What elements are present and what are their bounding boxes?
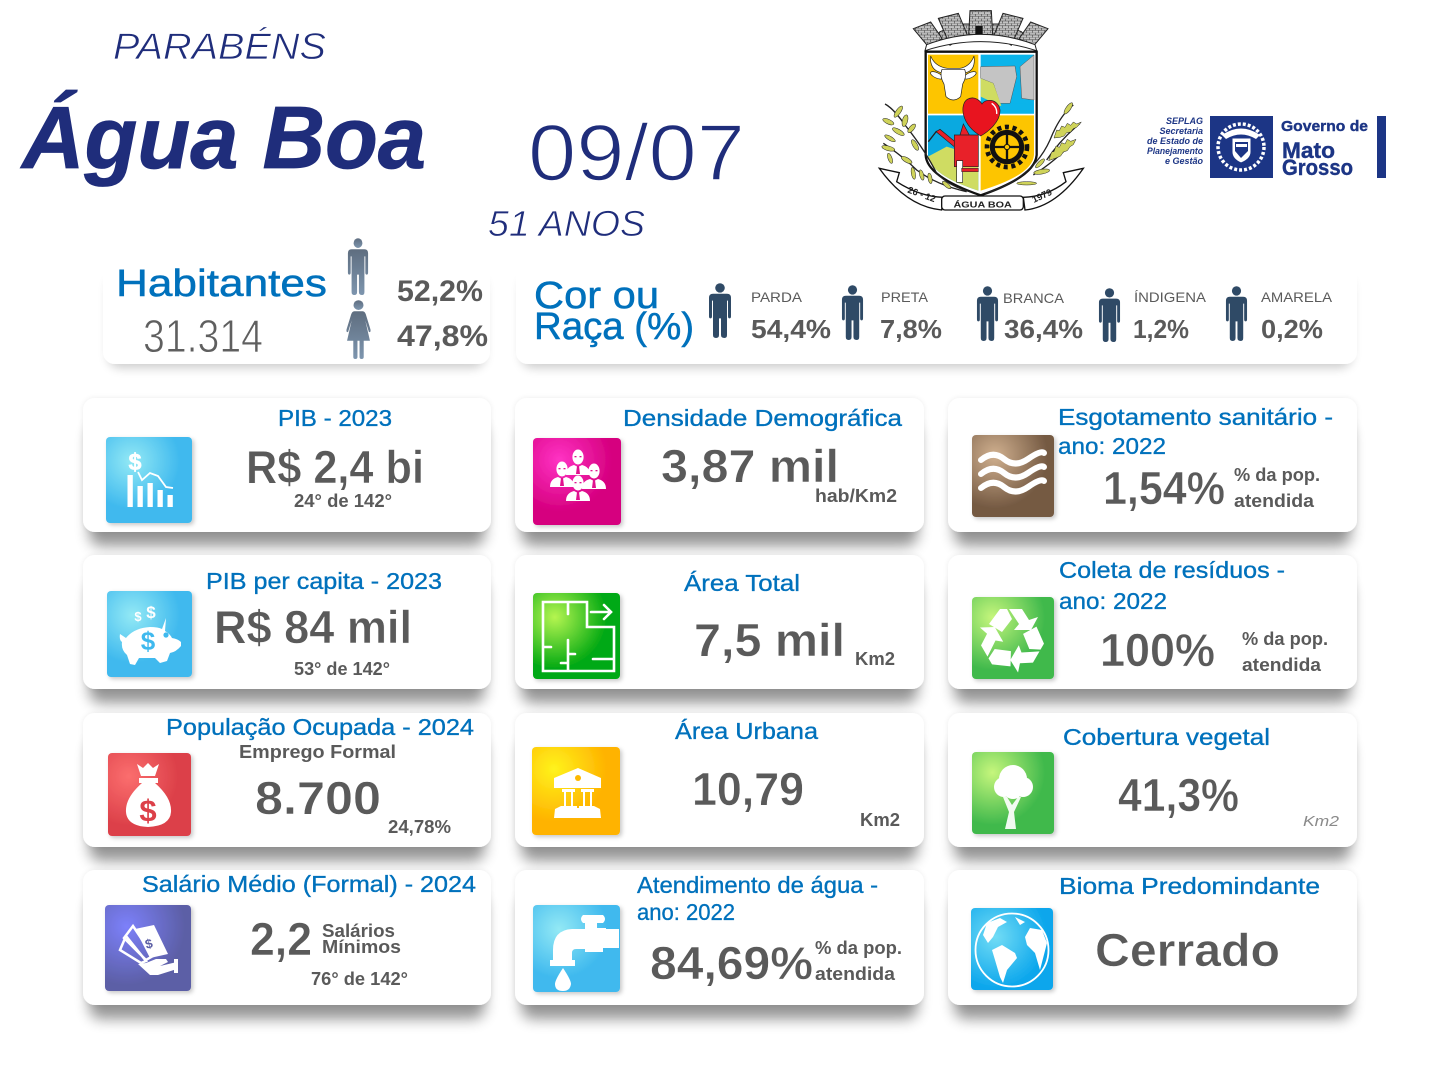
icon: money bag	[108, 753, 191, 836]
value: 7,5 mil	[694, 614, 845, 666]
wreath: branch and wheat	[881, 102, 1081, 193]
icon: water tap	[533, 905, 620, 992]
label: Habitantes: Habitantes	[116, 263, 327, 305]
group: preta: PRETA	[881, 289, 929, 305]
heading: Cor ou Raça: Cor ou	[534, 275, 659, 317]
shield	[926, 52, 1037, 195]
panel: coleta de resíduos	[948, 555, 1357, 689]
group: amarela: 0,2%	[1261, 314, 1323, 344]
ranking: 53° de 142°	[294, 659, 390, 679]
ribbon with motto: 26 - 12	[906, 185, 937, 204]
icon: floor plan	[533, 593, 620, 679]
panel: cobertura vegetal	[948, 713, 1357, 847]
icon: money bag: $	[139, 793, 157, 828]
heading: PARABÉNS: PARABÉNS	[113, 26, 326, 67]
panel: área total	[515, 555, 924, 689]
card background	[83, 713, 491, 847]
card background	[83, 398, 491, 532]
unit: % da pop.	[1234, 465, 1320, 485]
SEPLAG wording	[1147, 116, 1203, 166]
card background	[83, 870, 491, 1005]
unit	[1242, 629, 1328, 675]
logo: SEPLAG Governo de Mato Grosso	[1147, 116, 1386, 180]
value: 84,69%	[650, 937, 813, 989]
card background	[515, 398, 924, 532]
SEPLAG wording: SEPLAG	[1166, 116, 1203, 126]
wordmark	[1281, 116, 1386, 180]
icon: globe	[971, 908, 1053, 990]
value: 2,2	[250, 913, 312, 965]
group: parda	[709, 283, 831, 344]
icon: cash in hand: $	[143, 935, 155, 952]
value: 31.314: 31.314	[143, 310, 263, 362]
panel: esgotamento sanitário	[948, 398, 1357, 532]
card background	[83, 555, 491, 689]
SEPLAG wording: de Estado de	[1147, 136, 1203, 146]
heading: PIB per capita - 2023	[206, 568, 442, 594]
unit: atendida	[815, 964, 896, 984]
unit: atendida	[1234, 491, 1315, 511]
icon: woman	[346, 300, 371, 359]
icon: city building	[532, 747, 620, 835]
value: Cerrado	[1095, 924, 1280, 976]
heading: Coleta de resíduos -	[1059, 557, 1285, 583]
group: parda: 54,4%	[751, 314, 831, 344]
panel: PIB per capita	[83, 555, 491, 689]
group: preta: 7,8%	[880, 314, 942, 344]
cor ou raça background	[516, 262, 1357, 364]
heading: PIB - 2023	[278, 405, 392, 431]
wordmark: Grosso	[1282, 155, 1353, 180]
heading: ano: 2022	[1059, 588, 1167, 614]
unit: Km2	[860, 810, 900, 830]
panel: atendimento de água	[515, 870, 924, 1005]
panel: área urbana	[515, 713, 924, 847]
heading	[1058, 404, 1333, 459]
card background	[515, 555, 924, 689]
share: 24,78%	[388, 817, 451, 837]
habitantes background	[103, 262, 490, 364]
heading: População Ocupada - 2024	[166, 714, 474, 740]
heading: ano: 2022	[637, 899, 735, 925]
unit: Salários	[322, 921, 395, 941]
group: amarela	[1226, 286, 1333, 344]
icon: waves	[972, 435, 1054, 517]
logo: brasão de Água Boa	[879, 11, 1083, 210]
heading: Cor ou Raça	[534, 275, 694, 348]
value: 41,3%	[1118, 769, 1239, 821]
heading: Salário Médio (Formal) - 2024	[142, 871, 476, 897]
heading	[1059, 557, 1285, 614]
card background	[948, 555, 1357, 689]
unit: % da pop.	[815, 938, 902, 958]
value: R$ 2,4 bi	[246, 441, 424, 493]
unit	[322, 921, 401, 957]
panel: bioma predominante	[948, 870, 1357, 1005]
unit: % da pop.	[1242, 629, 1328, 649]
icon: falling chart	[106, 437, 192, 523]
group: branca: BRANCA	[1003, 290, 1065, 306]
subtitle: 51 anos: 51 ANOS	[488, 203, 645, 244]
unit	[815, 938, 902, 984]
value: 3,87 mil	[661, 440, 839, 492]
card background	[948, 398, 1357, 532]
unit: Km2	[1303, 813, 1340, 830]
icon: piggy bank: $	[134, 609, 142, 624]
icon: recycle	[972, 597, 1054, 679]
date: 09/07: 09/07	[528, 108, 745, 197]
value: R$ 84 mil	[214, 601, 412, 653]
ribbon with motto: 1979	[1031, 187, 1054, 205]
panel: população ocupada	[83, 713, 491, 847]
group: indígena: 1,2%	[1133, 314, 1189, 344]
icon: piggy bank: $	[141, 626, 156, 656]
icon: piggy bank	[107, 591, 192, 677]
card background	[948, 870, 1357, 1005]
subheading: Emprego Formal	[239, 742, 396, 762]
heading: Cor ou Raça: Raça (%)	[534, 306, 694, 348]
group: amarela: AMARELA	[1261, 289, 1333, 305]
SEPLAG wording: Planejamento	[1147, 146, 1203, 156]
group: preta	[842, 285, 942, 344]
group: indígena: ÍNDIGENA	[1134, 289, 1207, 305]
heading: Esgotamento sanitário -	[1058, 404, 1333, 430]
group: parda: PARDA	[751, 289, 803, 305]
ribbon with motto	[879, 168, 1083, 210]
title: Água Boa: Água Boa	[20, 88, 426, 187]
coat of arms crown	[913, 11, 1048, 51]
wordmark: Mato	[1282, 138, 1335, 163]
state seal	[1210, 116, 1273, 178]
unit	[1234, 465, 1320, 511]
icon: piggy bank: $	[146, 603, 156, 622]
wordmark: Governo de	[1281, 118, 1368, 135]
heading: Área Total	[684, 570, 800, 596]
panel: PIB	[83, 398, 491, 532]
group: branca	[977, 286, 1083, 344]
heading: Bioma Predomindante	[1059, 873, 1320, 899]
card background	[515, 713, 924, 847]
panel: salário médio	[83, 870, 491, 1005]
value: 10,79	[692, 763, 804, 815]
icon: people	[533, 438, 621, 525]
group: branca: 36,4%	[1004, 314, 1083, 344]
icon: cash in hand	[105, 905, 191, 991]
panel: cor ou raça	[516, 262, 1357, 364]
heading: ano: 2022	[1058, 433, 1166, 459]
card background	[948, 713, 1357, 847]
panel: habitantes	[103, 238, 490, 364]
heading: Área Urbana	[675, 718, 818, 744]
heading	[637, 872, 878, 925]
value: 100%	[1100, 624, 1215, 676]
icon: falling chart: $	[129, 449, 142, 475]
group: indígena	[1099, 288, 1207, 344]
icon: man	[348, 238, 368, 295]
ranking: 76° de 142°	[311, 969, 408, 989]
unit: hab/Km2	[815, 486, 897, 506]
SEPLAG wording: e Gestão	[1165, 156, 1203, 166]
value: 1,54%	[1103, 462, 1225, 514]
female percentage: 47,8%	[397, 320, 488, 353]
panel: densidade demográfica	[515, 398, 924, 532]
icon: tree	[972, 752, 1054, 834]
male percentage: 52,2%	[397, 275, 483, 308]
heading: Densidade Demográfica	[623, 405, 902, 431]
heading: Atendimento de água -	[637, 872, 878, 898]
ribbon with motto: ÁGUA BOA	[953, 199, 1012, 209]
card background	[515, 870, 924, 1005]
unit: Km2	[855, 649, 895, 669]
heading: Cobertura vegetal	[1063, 724, 1270, 750]
unit: Mínimos	[322, 937, 401, 957]
ranking: 24° de 142°	[294, 491, 392, 511]
unit: atendida	[1242, 655, 1322, 675]
SEPLAG wording: Secretaria	[1159, 126, 1203, 136]
value: 8.700	[255, 772, 381, 824]
